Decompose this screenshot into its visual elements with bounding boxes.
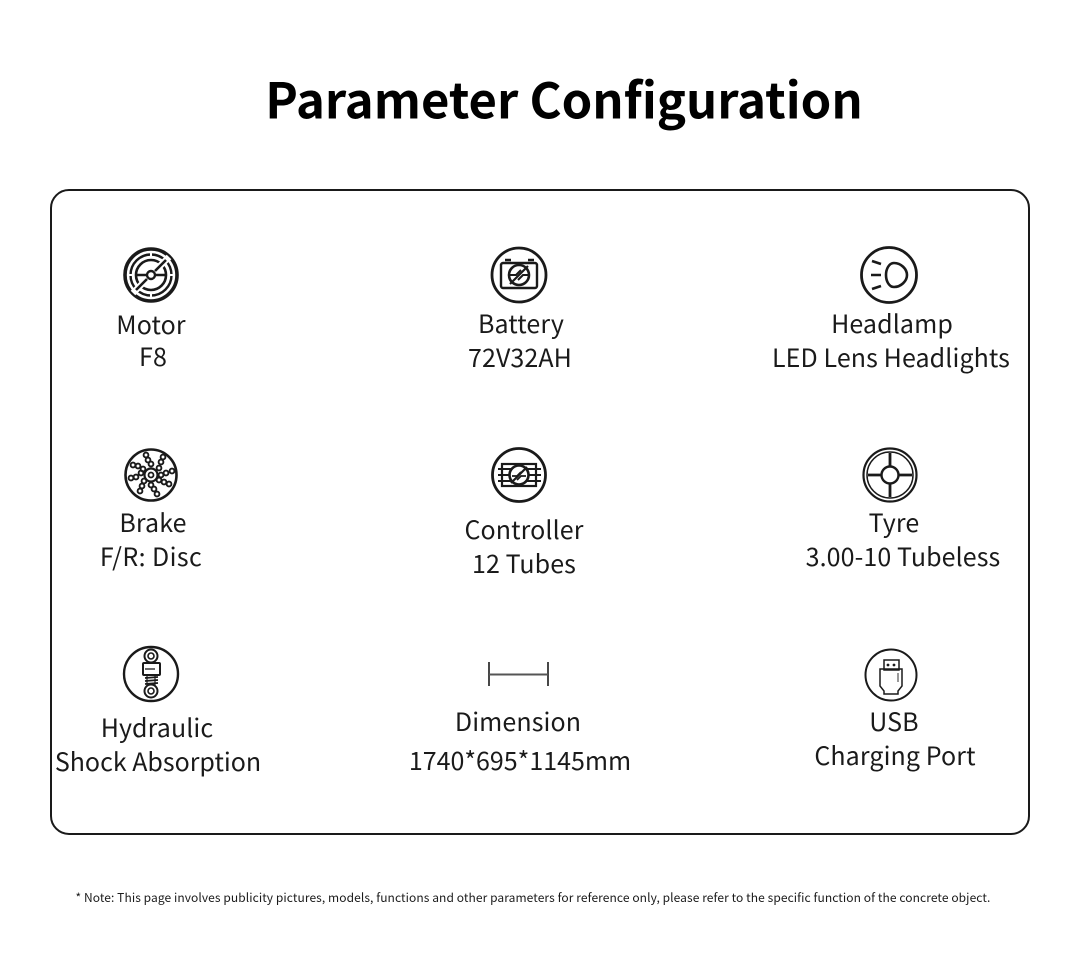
icon: headlamp [862,248,916,302]
title: Parameter Configuration [265,62,863,134]
icon: controller [492,448,546,502]
label: controller: 12 Tubes [472,545,576,581]
label: headlamp [772,305,1010,375]
label: motor: F8 [139,338,167,374]
label: hydraulic shock absorption: Hydraulic [101,709,213,745]
label: usb charging port [814,703,976,773]
label: dimension: Dimension [455,703,581,739]
label: battery: 72V32AH [468,339,572,375]
icon: hydraulic shock [124,647,178,701]
label: motor [116,306,186,374]
label: usb charging port: USB [869,703,919,739]
label: headlamp: Headlamp [831,305,953,341]
label: tyre: Tyre [869,504,919,540]
label: tyre: 3.00-10 Tubeless [806,538,1000,574]
label: brake: Brake [119,504,187,540]
label: tyre [806,504,1000,574]
icon: tyre [864,448,916,502]
label: battery [468,305,572,375]
label: brake [100,504,202,574]
icon: dimension [489,662,548,686]
icon: brake [126,450,176,500]
label: headlamp: LED Lens Headlights [772,339,1010,375]
label: brake: F/R: Disc [100,538,202,574]
label: controller [464,511,584,581]
icon: battery [492,248,546,302]
icon: motor [125,249,177,301]
label: controller: Controller [464,511,584,547]
label: usb charging port: Charging Port [814,737,976,773]
label: hydraulic shock absorption: Shock Absorption [55,743,261,779]
label: battery: Battery [478,305,564,341]
icon: usb [866,650,916,700]
label: hydraulic shock absorption [55,709,261,779]
footnote: * Note: This page involves publicity pictures, models, functions and other parameters for reference only, please refer to the specific function of the concrete object. [76,889,990,906]
label: motor: Motor [116,306,186,342]
label: dimension: 1740*695*1145mm [409,742,631,778]
panel: parameters [51,190,1029,834]
label: dimension [409,703,631,778]
